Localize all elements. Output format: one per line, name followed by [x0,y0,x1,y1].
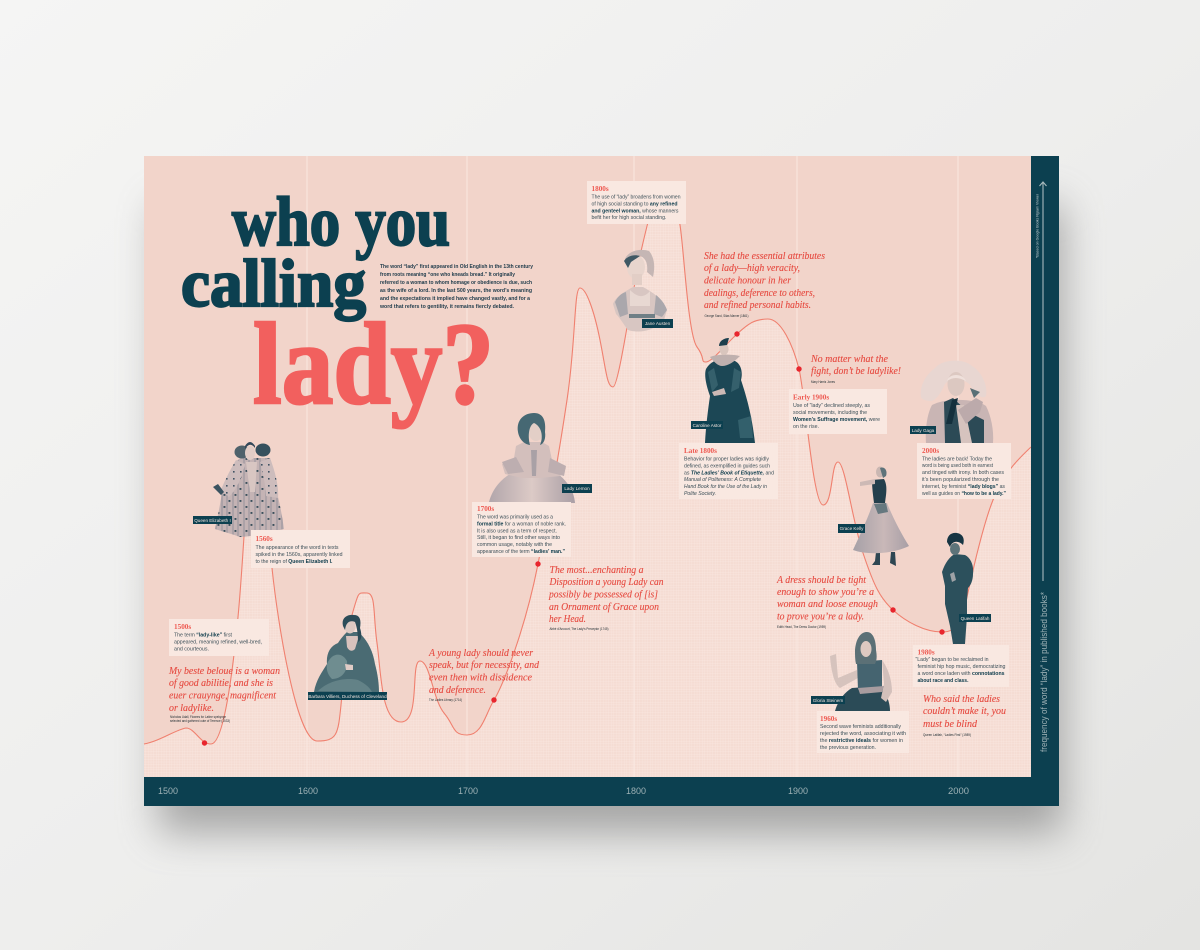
quote: My beste beloue: My beste beloue is a woman [168,665,280,677]
intro text: referred to a woman to whom homage or obedience is due, such [380,280,533,286]
text box: 1560s: 1560s [256,535,273,543]
text box: 1700s: It is also used as a term of respect. [477,528,557,534]
text box: 1700s [472,502,571,557]
axis year labels [158,786,969,797]
text box: 1800s: befit her for high social standing. [592,215,667,221]
label: Caroline Astor: Caroline Astor [693,423,722,428]
label: Queen Elizabeth I [193,516,232,524]
intro text: The word “lady” first appeared in Old English in the 13th century [380,264,534,270]
label: Gloria Steinem [811,696,845,704]
text box: 1700s: 1700s [477,505,494,513]
text box: Early 1900s: social movements, including the [793,410,867,416]
text box: 1560s: to the reign of Queen Elizabeth I. [256,559,333,565]
text box: Late 1800s: Late 1800s [684,447,717,455]
quote: She had the essential [704,250,825,318]
axis year labels: 2000 [948,786,969,797]
label: Queen Latifah: Queen Latifah [961,616,990,621]
text box: 2000s: it’s been popularized through the [922,477,999,483]
quote: My beste beloue: euer crauynge, magnificent [169,690,277,702]
quote: A young lady [428,647,540,702]
axis year labels: 1500 [158,786,178,797]
title [181,184,494,429]
text box: 1700s: The word was primarily used as a [477,514,554,520]
figure: Queen Latifah [942,533,973,644]
quote: The most enchanting: an Ornament of Grace upon [549,601,659,613]
quote: The most enchanting: possibly be possessed of [is] [548,588,658,600]
label: Gloria Steinem: Gloria Steinem [813,698,843,703]
quote: No matter what: No matter what the [810,353,888,365]
quote: No matter what: Mary Harris Jones [811,380,835,384]
text box: 1800s [587,181,686,224]
quote: A young lady: speak, but for necessity, and [429,659,540,671]
intro text: from roots meaning “one who kneads bread.” It originally [380,272,516,278]
text box: 1960s: Second wave feminists additionally [820,724,901,730]
text box: 1560s: The appearance of the word in texts [256,545,339,551]
text box: 1800s: 1800s [592,185,609,193]
label: Queen Latifah [959,614,991,622]
quote: My beste beloue: of good abilitie, and she is [169,677,273,689]
label: Caroline Astor [691,421,723,429]
quote: A dress should [776,574,878,629]
text box: 1980s: about race and class. [918,678,969,684]
text box: 2000s: word is being used both in earnest [921,463,993,469]
text box: Early 1900s: Women’s Suffrage movement, were [793,417,880,423]
quote: A dress should: Edith Head, The Dress Doctor (1959) [777,625,826,629]
quote: A young lady: The Ladies Library (1714) [429,698,462,702]
area under frequency curve [144,190,1031,777]
text box: Late 1800s: Hand Book for the Use of the Lady in [684,484,767,490]
label: Barbara Villiers: Barbara Villiers, Duchess of Cleveland [308,694,387,699]
text box: 1700s: appearance of the term “ladies’ man.” [477,549,565,555]
quote: A dress should: to prove you’re a lady. [777,610,864,622]
figure: Grace Kelly [853,466,909,566]
text box: 1960s: the previous generation. [820,745,876,751]
curve markers [202,331,945,746]
text box: 1800s: of high social standing to any refined [592,201,678,207]
quote: She had the essential: delicate honour in her [704,274,792,286]
text box: Late 1800s: Behavior for proper ladies was rigidly [684,456,769,462]
quote: A dress should: enough to show you’re a [777,586,874,598]
text box: 1800s: and genteel woman, whose manners [592,208,679,214]
figure: Lady Lemon [489,413,575,503]
quote: She had the essential: George Sand, Silas Marner (1861) [704,314,748,318]
y axis arrow [1040,182,1046,581]
text box: 1960s: rejected the word, associating it with [820,731,906,737]
quote: She had the essential: dealings, deference to others, [704,287,815,299]
text box: 1960s: the restrictive ideals for women in [820,738,903,744]
right axis band [1031,156,1059,806]
text box: 2000s: 2000s [922,447,939,455]
quote: The most enchanting [548,564,664,631]
intro text: and the expectations it implied have changed vastly, and for a [380,296,531,302]
text box: 1700s: common usage, notably with the [477,542,552,548]
text box: 2000s: well as guides on “how to be a lady.” [921,491,1006,497]
quote: Who said the ladies: couldn’t make it, you [923,705,1007,717]
quote: A dress should: woman and loose enough [777,598,878,610]
text box: Late 1800s: Polite Society. [684,491,716,497]
text box: 1500s: appeared, meaning refined, well-bred, [174,640,262,646]
quote: Who said the ladies: Queen Latifah, “Ladies First” (1989) [923,733,971,737]
text box: 1960s: 1960s [820,715,837,723]
label: Barbara Villiers [308,692,387,700]
text box: 1800s: The use of “lady” broadens from women [592,194,680,200]
axis year labels: 1700 [458,786,478,797]
y axis footnote: *Based on Google Books Ngram Viewer [1036,193,1040,258]
text box: 1560s [251,530,350,568]
label: Lady Lemon: Lady Lemon [564,486,590,491]
figure: Jane Austen [613,250,667,332]
y axis label: frequency of word “lady” in published books* [1039,592,1049,752]
text box: 2000s: and tinged with irony. In both cases [922,470,1004,476]
text box: 1980s [913,645,1009,687]
text box: Late 1800s: Manual of Politeness: A Complete [684,477,761,483]
text box: Early 1900s: Use of “lady” declined steeply, as [793,403,870,409]
text box: 2000s: The ladies are back! Today the [922,456,992,462]
text box: 1500s [169,619,269,656]
quote: A young lady: and deference. [429,684,486,696]
label: Grace Kelly [838,524,865,533]
text box: Early 1900s [789,389,887,434]
text box: 1980s: 1980s [918,648,935,656]
quote: Who said the ladies [923,693,1007,737]
figure: Queen Elizabeth I [213,442,284,537]
axis year labels: 1800 [626,786,646,797]
quote: A young lady: even then with dissidence [429,672,532,684]
text box: Early 1900s: on the rise. [793,424,819,430]
chart background [144,156,1059,806]
axis year labels: 1600 [298,786,318,797]
text box: 1960s [817,711,909,753]
text box: Late 1800s: as The Ladies’ Book of Etiquette, and [684,470,774,476]
text box: Late 1800s [679,443,778,499]
label: Jane Austen [642,319,673,328]
intro text: word that refers to gentility, it remains fiercly debated. [379,304,514,310]
label: Grace Kelly: Grace Kelly [840,526,864,531]
quote: Who said the ladies: must be blind [923,718,978,730]
bottom axis band [144,777,1059,806]
text box: 1500s: 1500s [174,623,191,631]
quote: No matter what: fight, don’t be ladylike! [811,365,901,377]
text box: Late 1800s: defined, as exemplified in guides such [684,463,770,469]
text box: 1500s: and courteous. [174,646,209,652]
text box: 1980s: feminist hip hop music, democratizing [918,664,1006,670]
quote: No matter what [810,353,901,384]
label: Jane Austen: Jane Austen [645,321,671,326]
quote: The most enchanting: her Head. [549,613,586,625]
text box: 1980s: “Lady” began to be reclaimed in [916,657,988,663]
text box: 1560s: spiked in the 1560s, apparently linked [256,552,342,558]
poster shadow [158,205,1063,833]
title line: calling: calling [181,245,366,321]
axis year labels: 1900 [788,786,808,797]
figure: Barbara Villiers [314,615,379,692]
century grid lines [307,156,958,777]
figure: Lady Gaga [921,361,993,443]
quote: The most enchanting: Disposition a young Lady can [549,576,664,588]
title line: who you: who you [232,184,450,261]
text box: 2000s [917,443,1011,499]
text box: 1700s: Still, it began to find other ways into [477,535,560,541]
quote: She had the essential: of a lady—high veracity, [704,262,800,274]
label: Queen Elizabeth I: Queen Elizabeth I [194,518,231,523]
quote: A young lady: A young lady should never [428,647,534,659]
quote: The most enchanting: Abbé d’Ancourt, The Lady’s Preceptor (1745) [550,627,608,631]
figure: Gloria Steinem [830,632,892,711]
quote: Who said the ladies: Who said the ladies [923,693,1000,705]
text box: 2000s: internet, by feminist “lady blogs” as [922,484,1005,490]
quote: The most enchanting: The most...enchanting a [550,564,644,576]
text box: 1980s: a word once laden with connotations [918,671,1004,677]
label: Lady Gaga: Lady Gaga [912,428,935,433]
frequency curve [144,190,1031,744]
quote: My beste beloue: Nicholas Udall, Flowres for Latine spekynge [170,715,226,719]
intro text: as the wife of a lord. In the last 500 years, the word’s meaning [380,288,533,294]
intro text [379,264,534,310]
quote: She had the essential: She had the essential attributes [704,250,825,262]
text box: 1500s: The term “lady-like” first [174,632,232,638]
quote: My beste beloue: selected and gathered oute of Terence (1533) [170,719,230,723]
quote: She had the essential: and refined personal habits. [704,299,811,311]
figure: Caroline Astor [705,338,755,443]
label: Lady Lemon [562,484,592,493]
poster [144,156,1059,806]
quote: My beste beloue: or ladylike. [169,702,214,714]
text box: 1700s: formal title for a woman of noble rank. [477,521,566,527]
quote: A dress should: A dress should be tight [776,574,867,586]
text box: Early 1900s: Early 1900s [793,394,829,402]
quote: My beste beloue [168,665,280,723]
title line: lady?: lady? [253,300,494,429]
label: Lady Gaga [910,426,936,434]
